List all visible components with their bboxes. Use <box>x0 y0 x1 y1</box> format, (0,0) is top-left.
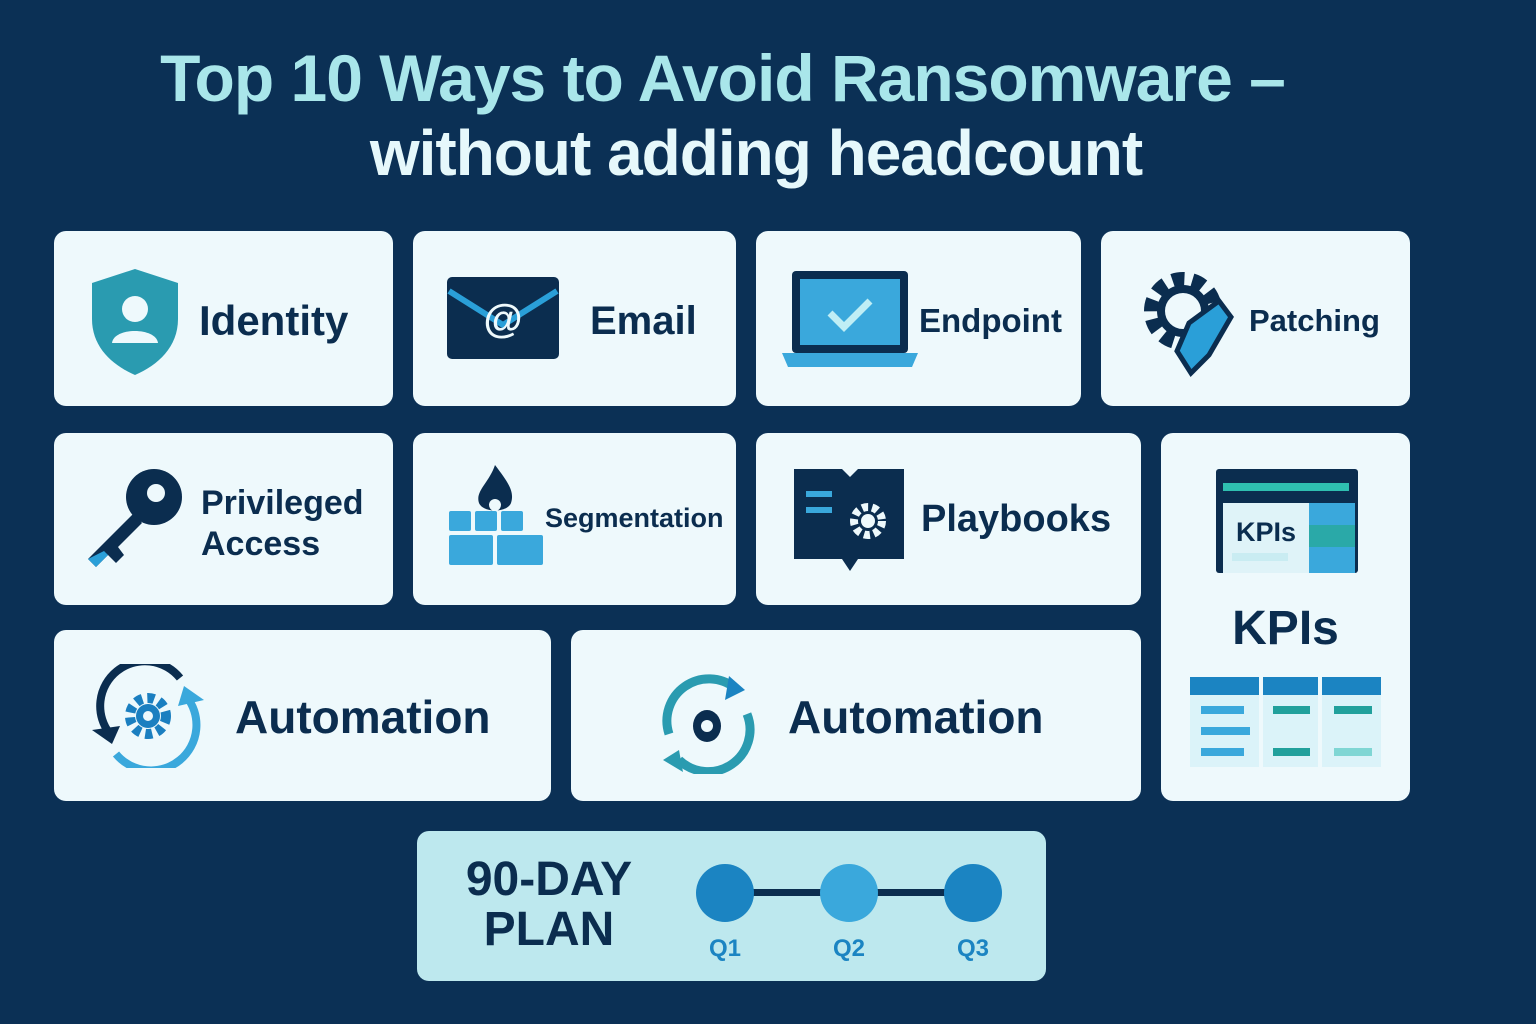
icon: laptop <box>782 271 918 367</box>
heading <box>466 853 632 956</box>
label: Segmentation <box>545 503 724 533</box>
icon: shield <box>92 269 178 375</box>
timeline: Q3 <box>957 935 989 962</box>
label: Endpoint <box>919 302 1062 339</box>
card: privileged access <box>54 433 393 605</box>
icon: table <box>1190 677 1381 767</box>
card: endpoint <box>756 231 1081 406</box>
card: email <box>413 231 736 406</box>
card: KPIs <box>1161 433 1410 801</box>
label: Privileged <box>201 484 364 522</box>
card: playbooks <box>756 433 1141 605</box>
timeline <box>696 864 1002 962</box>
heading: PLAN <box>484 903 614 956</box>
icon: key <box>88 469 182 567</box>
label: Access <box>201 525 320 563</box>
label: Playbooks <box>921 498 1111 540</box>
timeline: Q2 <box>833 935 865 962</box>
label: Patching <box>1249 303 1380 338</box>
card: patching <box>1101 231 1410 406</box>
icon: gear with patch <box>1144 272 1234 377</box>
label: KPIs <box>1232 602 1339 655</box>
heading: 90-DAY <box>466 853 632 906</box>
icon: envelope: @ <box>483 297 523 341</box>
icon: book gear <box>794 469 904 571</box>
icon: firewall <box>449 465 543 565</box>
icon: sync arrows <box>662 674 755 774</box>
timeline: Q1 <box>709 935 741 962</box>
card: segmentation <box>413 433 736 605</box>
title: Top 10 Ways to Avoid Ransomware – <box>160 41 1285 115</box>
label: Email <box>590 299 697 343</box>
icon: gear cycle <box>92 664 204 768</box>
icon: dashboard <box>1216 469 1358 573</box>
card: automation 1 <box>54 630 551 801</box>
label: Identity <box>199 297 348 344</box>
card: automation 2 <box>571 630 1141 801</box>
label: Automation <box>235 691 491 743</box>
card: identity <box>54 231 393 406</box>
label <box>201 484 364 563</box>
panel: 90-day plan <box>417 831 1046 981</box>
icon: envelope <box>447 277 559 359</box>
label: Automation <box>788 691 1044 743</box>
subtitle: without adding headcount <box>370 117 1142 189</box>
icon: dashboard: KPIs <box>1236 517 1296 547</box>
